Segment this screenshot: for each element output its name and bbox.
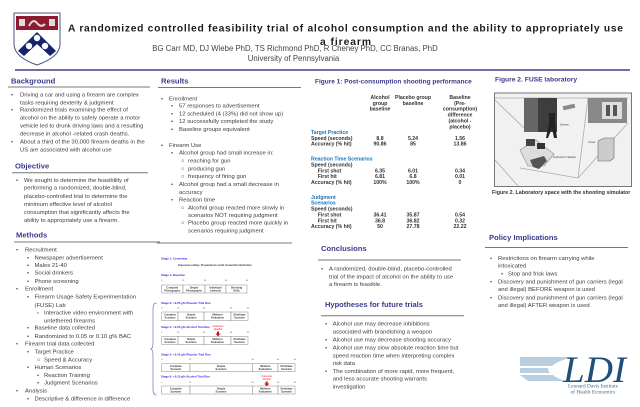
results list: Placebo group reacted more quickly in: [188, 221, 288, 227]
results list: Alcohol group had small increase in:: [179, 150, 274, 156]
logo: Leonard Davis Institute: [520, 350, 628, 396]
stage 6: high dose alcohol timeline: Shotblaze: [280, 386, 293, 390]
heading: methods: Methods: [16, 230, 47, 240]
stage 4: low dose alcohol timeline: Scenario: [165, 340, 176, 344]
policy list: •: [490, 256, 492, 262]
stage 4: low dose alcohol timeline: Consume: [213, 325, 224, 328]
conclusions text: A randomized, double-blind, placebo-controlled: [329, 266, 452, 272]
stage 3: low dose placebo timeline: Evaluation: [211, 316, 224, 320]
stage 5: high dose placebo timeline: 0: [161, 359, 163, 361]
methods list: Human Scenarios: [34, 365, 81, 371]
heading: figure 1: Figure 1: Post-consumption shooting performance: [315, 78, 472, 86]
results list: 12 scheduled (4 (33%) did not show up): [179, 111, 283, 117]
results list: Reaction time: [179, 198, 216, 204]
table column headers: difference: [448, 113, 473, 119]
panel: background: [8, 76, 150, 153]
table column headers: (alcohol -: [448, 119, 472, 125]
stage 5: high dose placebo timeline: Scenario: [216, 367, 227, 371]
table: target practice: 90.86: [374, 142, 387, 148]
table: target practice: 1.56: [455, 136, 465, 142]
stage 3: low dose placebo timeline: Midterm: [212, 312, 223, 316]
objective text: [16, 178, 130, 224]
methods list: •: [37, 373, 39, 379]
table column headers: Baseline: [449, 95, 471, 101]
stage 6: high dose alcohol timeline: 60: [294, 382, 297, 384]
stage 2: baseline timeline: Stage 2: Baseline: [161, 273, 185, 277]
table: judgment scenarios: 22.22: [454, 224, 467, 230]
hypotheses list: investigation: [333, 384, 365, 390]
table column headers: Placebo group: [395, 95, 431, 101]
stage 6: high dose alcohol timeline: Evaluation: [259, 390, 272, 394]
authors and affiliation: BG Carr MD, DJ Wiebe PhD, TS Richmond PhD, R Cheney PhD, CC Branas, PhD: [152, 44, 438, 53]
methods list: untethered firearms: [44, 318, 95, 324]
stage 3: low dose placebo timeline: Scenario: [165, 316, 176, 320]
background bullets: tasks requiring dexterity & judgment: [20, 100, 114, 106]
table: judgment scenarios: 36.41: [374, 212, 387, 218]
stage 2: baseline timeline: Individual: [209, 286, 222, 290]
stage 3: low dose placebo timeline: 0: [161, 308, 163, 310]
methods list: Firearm trial data collected: [25, 342, 94, 348]
stage 2: baseline timeline: Drills: [233, 288, 240, 292]
table: reaction time scenarios: 6.35: [375, 168, 385, 174]
table: target practice: Target Practice: [311, 130, 348, 136]
stage 4: low dose alcohol timeline: 45: [230, 332, 233, 334]
methods list: Interactive video environment with: [44, 310, 133, 316]
methods list: •: [27, 365, 29, 371]
objective text: consumption that significantly affects the: [24, 210, 130, 216]
table: judgment scenarios: Accuracy (% hit): [311, 224, 352, 230]
methods list: Speed & Accuracy: [44, 357, 92, 363]
table: target practice: Speed (seconds): [311, 136, 353, 142]
methods list: Reaction Training: [44, 373, 90, 379]
policy list: and illegal) BEFORE weapon is used: [498, 287, 595, 293]
table: judgment scenarios: [311, 195, 467, 230]
heading: background: Background: [11, 76, 56, 86]
results list: ○: [181, 166, 185, 172]
table: judgment scenarios: Speed (seconds): [311, 207, 353, 213]
methods list: •: [16, 389, 18, 395]
stage 6: high dose alcohol timeline: Scenario: [216, 390, 227, 394]
table column headers: consumption): [443, 107, 477, 113]
results list: 12 successfully completed the study: [179, 119, 273, 125]
table: judgment scenarios: 50: [377, 224, 383, 230]
background bullets: decrease in alcohol -related crash deaths.: [20, 132, 130, 138]
results list: Firearm Use: [169, 143, 202, 149]
stage 5: high dose placebo timeline: Scenario: [281, 367, 292, 371]
methods list: Analysis: [25, 389, 47, 395]
table: judgment scenarios: First hit: [318, 218, 337, 224]
results list: Enrollment: [169, 96, 198, 102]
heading: policy implications: Policy Implications: [489, 233, 558, 242]
heading: hypotheses: Hypotheses for future trials: [325, 300, 423, 309]
table: reaction time scenarios: 0: [459, 180, 462, 186]
stage 5: high dose placebo timeline: Stage 5: <0.10 g% Placebo Trial Run: [161, 353, 211, 357]
stage 6: high dose alcohol timeline: 45: [277, 382, 280, 384]
stage 3: low dose placebo timeline: Simple: [187, 312, 196, 316]
table: reaction time scenarios: Reaction Time Scenarios: [311, 157, 373, 163]
heading: objective: Objective: [15, 162, 49, 170]
logo: Leonard Davis Institute: LDI: [562, 350, 628, 391]
results list: scenarios NOT requiring judgment: [188, 213, 278, 219]
methods list: Firearm Usage Safety Experimentation: [34, 295, 136, 301]
stage 3: low dose placebo timeline: 60: [247, 308, 250, 310]
methods list: •: [27, 396, 29, 402]
methods list: •: [27, 279, 29, 285]
panel: policy implications: [485, 233, 628, 309]
policy list: Stop and frisk laws: [508, 271, 557, 277]
methods list: •: [37, 381, 39, 387]
stage 4: low dose alcohol timeline: Midterm: [212, 337, 223, 341]
stage 5: high dose placebo timeline: Complete: [170, 364, 182, 368]
methods list: Baseline data collected: [34, 326, 95, 332]
stage 4: low dose alcohol timeline: 60: [247, 332, 250, 334]
stage 6: high dose alcohol timeline: Alcohol: [263, 378, 271, 381]
results list: •: [171, 127, 173, 133]
hypotheses list: speed reaction time when interpreting complex: [333, 354, 455, 360]
table: target practice: 13.86: [454, 142, 467, 148]
table column headers: placebo): [449, 125, 471, 131]
results list: ○: [181, 205, 185, 211]
methods list: ▫: [37, 310, 39, 316]
policy list: •: [490, 295, 492, 301]
stage 3: low dose placebo timeline: Shotblaze: [233, 312, 246, 316]
results list: ○: [181, 221, 185, 227]
policy list: [490, 256, 623, 309]
policy list: Discovery and punishment of gun carriers (legal: [498, 295, 623, 301]
background bullets: [11, 92, 145, 153]
methods list: •: [27, 334, 29, 340]
table: reaction time scenarios: 0.34: [455, 168, 465, 174]
table: reaction time scenarios: First hit: [318, 174, 337, 180]
table: reaction time scenarios: 6.8: [409, 174, 417, 180]
stage 4: low dose alcohol timeline: Scenario: [186, 340, 197, 344]
table column headers: Alcohol: [370, 95, 390, 101]
methods list: Judgment Scenarios: [44, 381, 98, 387]
panel: hypotheses: [321, 300, 464, 390]
heading: figure 2: Figure 2. FUSE laboratory: [495, 76, 577, 84]
stage 6: high dose alcohol timeline: Midterm: [260, 386, 271, 390]
stage 3: low dose placebo timeline: 15: [177, 308, 180, 310]
results list: frequency of firing gun: [188, 174, 246, 180]
results list: •: [171, 104, 173, 110]
stage 3: low dose placebo timeline: Stage 3: <0.05 g% Placebo Trial Run: [161, 301, 211, 305]
stage 5: high dose placebo timeline: 15: [189, 359, 192, 361]
hypotheses list: and less accurate shooting warrants: [333, 377, 427, 383]
methods list: Phone screening: [34, 279, 79, 285]
panel: objective: [12, 162, 148, 224]
policy list: Discovery and punishment of gun carriers (legal: [498, 280, 623, 286]
methods list: •: [27, 295, 29, 301]
logo: Leonard Davis Institute: of Health Economics: [571, 388, 615, 396]
stage 6: high dose alcohol timeline: Simple: [217, 386, 226, 390]
table: judgment scenarios: 0.32: [455, 218, 465, 224]
arrow: alcohol dose high: [264, 382, 269, 386]
results list: reaching for gun: [188, 159, 231, 165]
table: target practice: 5.24: [408, 136, 418, 142]
table column headers: baseline: [403, 101, 423, 107]
table column headers: group: [373, 101, 387, 107]
table: reaction time scenarios: 0.01: [455, 174, 465, 180]
table: target practice: 85: [410, 142, 416, 148]
methods list: Randomized to 0.05 or 0.10 g% BAC: [34, 334, 132, 340]
conclusions text: [321, 266, 454, 288]
stage 4: low dose alcohol timeline: 15: [177, 332, 180, 334]
results list: ○: [181, 159, 185, 165]
results list: 57 responses to advertisement: [179, 104, 260, 110]
stage 5: high dose placebo timeline: 30: [251, 359, 255, 361]
background bullets: vehicle led to drunk driving laws and a resulting: [20, 124, 143, 130]
results list: •: [171, 182, 173, 188]
hypotheses list: •: [325, 338, 327, 344]
stage 5: high dose placebo timeline: Scenario: [170, 367, 182, 371]
objective text: ability to appropriately use a firearm.: [24, 218, 119, 224]
results list: producing gun: [188, 166, 225, 172]
stage 3: low dose placebo timeline: Complete: [164, 312, 176, 316]
hypotheses list: •: [325, 322, 327, 328]
table: reaction time scenarios: 100%: [373, 180, 387, 186]
methods list: •: [27, 263, 29, 269]
results list: Baseline groups equivalent: [179, 127, 250, 133]
methods list: ○: [37, 357, 41, 363]
stage 6: high dose alcohol timeline: Scenario: [281, 390, 292, 394]
methods list: Enrollment: [25, 287, 54, 293]
policy list: and illegal) AFTER weapon is used: [498, 303, 590, 309]
authors and affiliation: University of Pennsylvania: [248, 54, 340, 63]
stage 2: baseline timeline: 30: [204, 280, 207, 282]
background bullets: alcohol on the ability to safely operate a motor: [20, 116, 140, 122]
methods list: •: [27, 271, 29, 277]
table: reaction time scenarios: Speed (seconds): [311, 163, 353, 169]
stage 5: high dose placebo timeline: Shotblaze: [280, 364, 293, 368]
hypotheses list: •: [325, 369, 327, 375]
background bullets: Randomized trials examining the effect of: [20, 107, 128, 113]
heading: conclusions: Conclusions: [321, 244, 367, 253]
stage 6: high dose alcohol timeline: [161, 375, 297, 394]
background bullets: Driving a car and using a firearm are complex: [20, 92, 139, 98]
stage 1: screening: Stage 1: Screening: [161, 257, 187, 261]
table: reaction time scenarios: 6.01: [408, 168, 418, 174]
stage 2: baseline timeline: [161, 273, 249, 293]
illustration: laboratory space: Screen: [560, 122, 569, 126]
methods list: •: [16, 342, 18, 348]
stage 2: baseline timeline: 0: [161, 280, 163, 282]
background bullets: About a third of the 30,000 firearm deaths in the: [20, 139, 145, 145]
stage 4: low dose alcohol timeline: 30: [203, 332, 206, 334]
stage 5: high dose placebo timeline: 60: [294, 359, 297, 361]
table: reaction time scenarios: 6.81: [375, 174, 385, 180]
results list: ○: [181, 174, 185, 180]
conclusions text: a firearm is feasible.: [329, 282, 382, 288]
results list: [161, 96, 288, 234]
methods list: •: [27, 350, 29, 356]
stage 2: baseline timeline: Photographs: [186, 288, 203, 292]
hypotheses list: risk data: [333, 361, 356, 367]
methods list: •: [27, 326, 29, 332]
stage 2: baseline timeline: Photographs: [164, 288, 181, 292]
arrow: alcohol dose: [216, 332, 220, 336]
stage 3: low dose placebo timeline: 30: [203, 308, 206, 310]
table: judgment scenarios: Judgment: [311, 195, 336, 201]
hypotheses list: associated with brandishing a weapon: [333, 330, 432, 336]
stage 3: low dose placebo timeline: 45: [230, 308, 233, 310]
methods list: Recruitment: [25, 247, 57, 253]
panel: results: [158, 76, 301, 234]
methods list: Descriptive & difference in difference: [34, 396, 131, 402]
table: reaction time scenarios: First shot: [318, 168, 342, 174]
table: judgment scenarios: 36.8: [375, 218, 385, 224]
results list: •: [171, 150, 173, 156]
objective text: minimum effective level of alcohol: [24, 202, 112, 208]
stage 4: low dose alcohol timeline: 0: [161, 332, 163, 334]
table: target practice: Accuracy (% hit): [311, 142, 352, 148]
table column headers: baseline: [370, 107, 390, 113]
stage 4: low dose alcohol timeline: Stage 4: <0.05 g% Alcohol Trial Run: [161, 325, 210, 329]
stage 6: high dose alcohol timeline: Complete: [170, 386, 182, 390]
results list: accuracy: [179, 190, 203, 196]
conclusions text: •: [321, 266, 323, 272]
methods list: •: [27, 255, 29, 261]
hypotheses list: The combination of more rapid, more frequent,: [333, 369, 455, 375]
heading: results: Results: [161, 76, 188, 86]
stage 2: baseline timeline: Shooting: [231, 286, 243, 290]
illustration: laboratory space: Cover: [588, 140, 596, 144]
table: judgment scenarios: 27.78: [407, 224, 420, 230]
stage 5: high dose placebo timeline: [161, 353, 297, 372]
stage 6: high dose alcohol timeline: 30: [251, 382, 255, 384]
methods list: Newspaper advertisement: [34, 255, 103, 261]
illustration: laboratory space: Instructor's Station: [553, 155, 577, 159]
stage 4: low dose alcohol timeline: Scenario: [234, 340, 245, 344]
stage 4: low dose alcohol timeline: Simple: [187, 337, 196, 341]
stage 6: high dose alcohol timeline: Stage 6: <0.10 g% Alcohol Trial Run: [161, 375, 210, 379]
stage 4: low dose alcohol timeline: Alcohol: [214, 328, 223, 331]
brace linking methods to stages: [150, 303, 156, 395]
hypotheses list: Alcohol use may decrease shooting accuracy: [333, 338, 451, 344]
background bullets: •: [11, 92, 13, 98]
stage 6: high dose alcohol timeline: 15: [189, 382, 192, 384]
logo: Leonard Davis Institute: Leonard Davis Institute: [568, 384, 619, 390]
background bullets: US are associated with alcohol use: [20, 147, 112, 153]
hypotheses list: [325, 322, 459, 390]
results list: •: [171, 198, 173, 204]
logo: University of Pennsylvania shield: [14, 13, 60, 65]
hypotheses list: Alcohol use may decrease inhibitions: [333, 322, 430, 328]
title: [68, 24, 623, 48]
title: a firearm: [320, 37, 371, 48]
stage 3: low dose placebo timeline: [161, 301, 250, 320]
stage 2: baseline timeline: Complete: [166, 286, 179, 290]
results list: Alcohol group reacted more slowly in: [188, 205, 284, 211]
panel: methods: [14, 230, 160, 402]
methods list: Males 21-40: [34, 263, 68, 269]
stage 2: baseline timeline: Simple: [190, 286, 199, 290]
table: target practice: 8.8: [376, 136, 384, 142]
hypotheses list: •: [325, 346, 327, 352]
authors and affiliation: [152, 44, 438, 63]
stage 4: low dose alcohol timeline: Shotblaze: [233, 337, 246, 341]
objective text: placebo-controlled trial to determine the: [24, 194, 128, 200]
methods list: •: [16, 247, 18, 253]
table: judgment scenarios: 35.87: [407, 212, 420, 218]
policy list: •: [490, 280, 492, 286]
panel: figure 1 table: [311, 78, 477, 230]
results list: •: [171, 119, 173, 125]
stage 4: low dose alcohol timeline: Complete: [164, 337, 176, 341]
table: judgment scenarios: Scenarios: [311, 201, 336, 207]
table: target practice: [311, 130, 467, 148]
stage 6: high dose alcohol timeline: Scenario: [170, 390, 182, 394]
stage 5: high dose placebo timeline: Simple: [217, 364, 226, 368]
policy list: •: [501, 271, 503, 277]
stage 6: high dose alcohol timeline: 0: [161, 382, 163, 384]
table: reaction time scenarios: [311, 157, 465, 186]
table: judgment scenarios: First shot: [318, 212, 342, 218]
objective text: performing a randomized, double-blind,: [24, 186, 127, 192]
stage 2: baseline timeline: 60: [246, 280, 249, 282]
hypotheses list: Alcohol use may slow absolute reaction time but: [333, 346, 459, 352]
stage 5: high dose placebo timeline: Midterm: [260, 364, 271, 368]
background bullets: •: [11, 107, 13, 113]
results list: scenarios requiring judgment: [188, 228, 264, 234]
panel: conclusions: [318, 244, 461, 288]
stage 3: low dose placebo timeline: Scenario: [234, 316, 245, 320]
title: A randomized controlled feasibility trial of alcohol consumption and the ability to appropriately use: [68, 24, 623, 34]
stage 6: high dose alcohol timeline: Consume: [261, 375, 273, 378]
conclusions text: trial of the impact of alcohol on the ability to use: [329, 274, 454, 280]
table: reaction time scenarios: Accuracy (% hit): [311, 180, 352, 186]
results list: •: [161, 96, 163, 102]
panel: figure 2: [492, 76, 632, 196]
table: judgment scenarios: 0.54: [455, 212, 465, 218]
stage 2: baseline timeline: Lawsuits: [210, 288, 222, 292]
policy list: Restrictions on firearm carrying while: [498, 256, 595, 262]
illustration: laboratory space: [494, 93, 632, 186]
methods list: (FUSE) Lab: [34, 303, 66, 309]
stage 2: baseline timeline: 15: [182, 280, 185, 282]
policy list: intoxicated: [498, 264, 526, 270]
table: judgment scenarios: 36.82: [407, 218, 420, 224]
stage 5: high dose placebo timeline: Evaluation: [259, 367, 272, 371]
stage 3: low dose placebo timeline: Scenario: [186, 316, 197, 320]
stage 4: low dose alcohol timeline: [161, 325, 250, 344]
table column headers: [370, 95, 477, 131]
methods list: [16, 247, 136, 402]
stage 4: low dose alcohol timeline: Evaluation: [211, 340, 224, 344]
stage 1: screening: [161, 257, 252, 267]
caption: Figure 2. Laboratory space with the shooting simulator: [492, 190, 630, 196]
objective text: •: [16, 178, 18, 184]
objective text: We sought to determine the feasibility of: [24, 178, 129, 184]
results list: •: [171, 111, 173, 117]
results list: •: [161, 143, 163, 149]
stage 2: baseline timeline: 45: [225, 280, 228, 282]
methods list: Target Practice: [34, 350, 75, 356]
results list: Alcohol group had a small decrease in: [179, 182, 279, 188]
methods list: Social drinkers: [34, 271, 73, 277]
background bullets: •: [11, 139, 13, 145]
table column headers: (Pre-: [454, 101, 466, 107]
table: reaction time scenarios: 100%: [406, 180, 420, 186]
stage 1: screening: Exposure-rating: 15 questions, brief visual discrimination: [178, 263, 252, 267]
stage 5: high dose placebo timeline: 45: [277, 359, 280, 361]
methods list: •: [16, 287, 18, 293]
